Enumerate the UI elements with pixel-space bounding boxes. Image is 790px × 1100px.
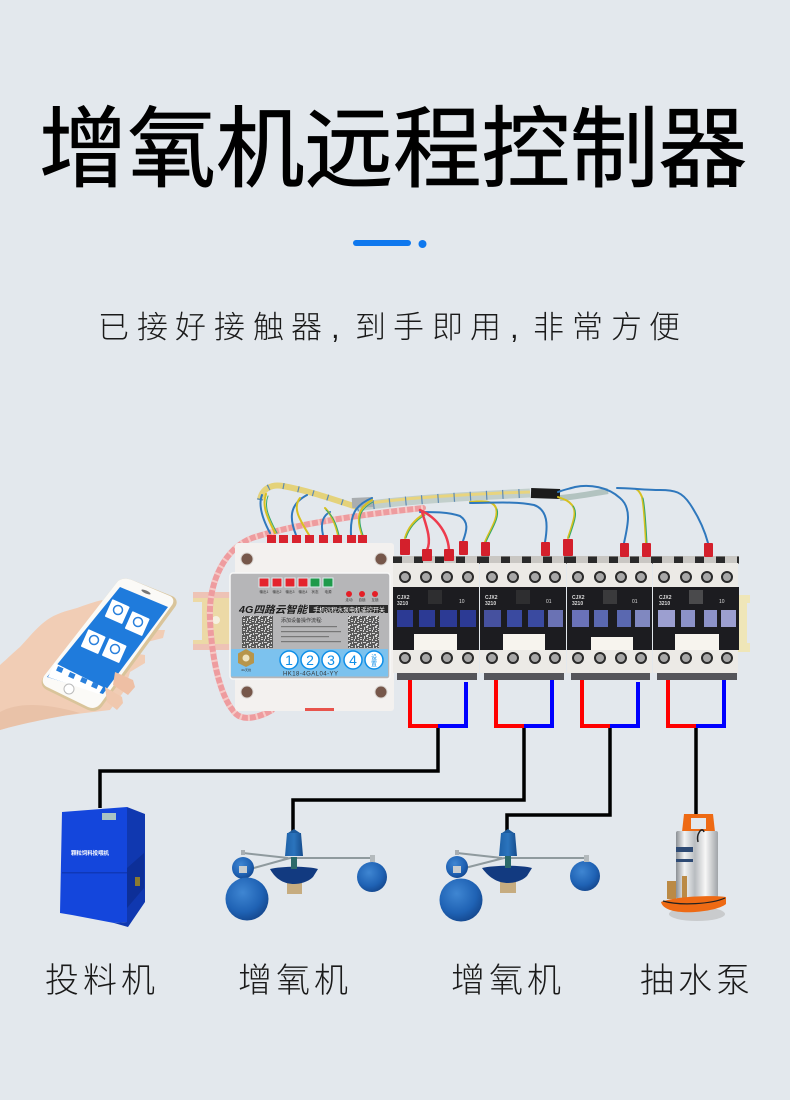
qr codes bbox=[242, 616, 273, 648]
controller housing bbox=[235, 543, 394, 711]
hand bbox=[0, 600, 165, 730]
feed machine: 颗粒饲料投喂机 bbox=[71, 849, 109, 857]
indicator labels: 输出1 bbox=[260, 589, 269, 594]
instructions: 添加设备操作流程: bbox=[281, 617, 322, 624]
indicator labels: 状态 bbox=[312, 589, 319, 594]
label: aerator right: 增氧机 bbox=[451, 962, 565, 1000]
indicator labels: 电源 bbox=[324, 589, 332, 594]
subtitle: 已接好接触器,到手即用,非常方便 bbox=[98, 310, 680, 345]
label: feed machine: 投料机 bbox=[45, 962, 159, 1000]
water pump bbox=[661, 814, 726, 921]
indicator labels: 输出3 bbox=[286, 589, 295, 594]
antenna connector: 4G天线 bbox=[241, 667, 251, 672]
contactor 3: 3210 bbox=[572, 601, 583, 607]
contactor 2 bbox=[480, 556, 567, 680]
indicator labels bbox=[260, 589, 379, 602]
contactor 4: 10 bbox=[719, 599, 725, 605]
contactor 2: CJX2 bbox=[485, 595, 498, 601]
key labels: 4 bbox=[349, 652, 357, 668]
din rail left bbox=[193, 592, 235, 650]
instructions bbox=[281, 617, 341, 642]
contactor 4 bbox=[653, 556, 739, 680]
feed machine bbox=[60, 807, 145, 927]
title: 增氧机远程控制器 bbox=[39, 100, 747, 199]
contactor 1: CJX2 bbox=[397, 595, 410, 601]
contactor 2: 3210 bbox=[485, 601, 496, 607]
indicator labels: 自锁 bbox=[358, 597, 366, 602]
numbered keys bbox=[280, 651, 383, 669]
indicator labels: 输出4 bbox=[299, 589, 308, 594]
bottom clip bbox=[305, 708, 334, 711]
contactor 3 bbox=[567, 556, 653, 680]
home button bbox=[64, 684, 74, 694]
din rail right bbox=[738, 595, 750, 652]
key labels: 置 bbox=[371, 661, 377, 668]
contactor terminals bbox=[400, 539, 713, 561]
indicator labels: 走动 bbox=[346, 597, 353, 602]
contactor 2: 01 bbox=[546, 599, 552, 605]
blue key band bbox=[231, 649, 388, 676]
aerator left bbox=[226, 829, 387, 920]
key labels bbox=[285, 652, 377, 668]
label: pump: 抽水泵 bbox=[640, 962, 754, 1000]
mounting holes bbox=[241, 553, 387, 698]
black device wires bbox=[100, 728, 696, 832]
phone body bbox=[42, 579, 177, 711]
power icons bbox=[90, 606, 142, 654]
accent divider bbox=[353, 240, 426, 248]
contactor 1: 10 bbox=[459, 599, 465, 605]
aerator right bbox=[440, 829, 600, 922]
contactor 4: CJX2 bbox=[659, 595, 672, 601]
key labels: 设 bbox=[371, 654, 377, 662]
antenna connector bbox=[238, 649, 254, 672]
red and blue contactor links bbox=[410, 680, 724, 726]
status leds bbox=[346, 591, 378, 597]
phone speaker bbox=[141, 589, 151, 595]
controller terminals bbox=[267, 535, 367, 543]
brand text: 4G四路云智能 bbox=[238, 604, 309, 616]
controller unit bbox=[230, 543, 394, 711]
signal wires bbox=[260, 486, 708, 552]
key labels: 1 bbox=[285, 652, 293, 668]
product band: 手机远程水泵电机遥控开关 bbox=[313, 605, 386, 614]
app buttons bbox=[81, 599, 150, 663]
fingertips bbox=[113, 672, 135, 695]
indicator labels: 互锁 bbox=[372, 597, 379, 602]
pink spiral tube bbox=[210, 508, 423, 718]
hand with phone bbox=[0, 579, 177, 730]
key labels: 3 bbox=[327, 652, 335, 668]
model number: HK18-4GAL04-YY bbox=[283, 672, 338, 678]
contactor 4: 3210 bbox=[659, 601, 670, 607]
output indicators bbox=[259, 578, 333, 587]
contactor 1 bbox=[393, 556, 480, 680]
contactor 3: CJX2 bbox=[572, 595, 585, 601]
key labels: 2 bbox=[306, 652, 314, 668]
phone screen bbox=[47, 587, 168, 694]
face panel bbox=[230, 573, 390, 679]
spiral wire bundle bbox=[260, 486, 608, 507]
label: aerator left: 增氧机 bbox=[238, 962, 352, 1000]
indicator labels: 输出2 bbox=[273, 589, 282, 594]
contactor 1: 3210 bbox=[397, 601, 408, 607]
app tabs bbox=[48, 663, 103, 694]
contactor 3: 01 bbox=[632, 599, 638, 605]
device labels bbox=[45, 962, 754, 1000]
